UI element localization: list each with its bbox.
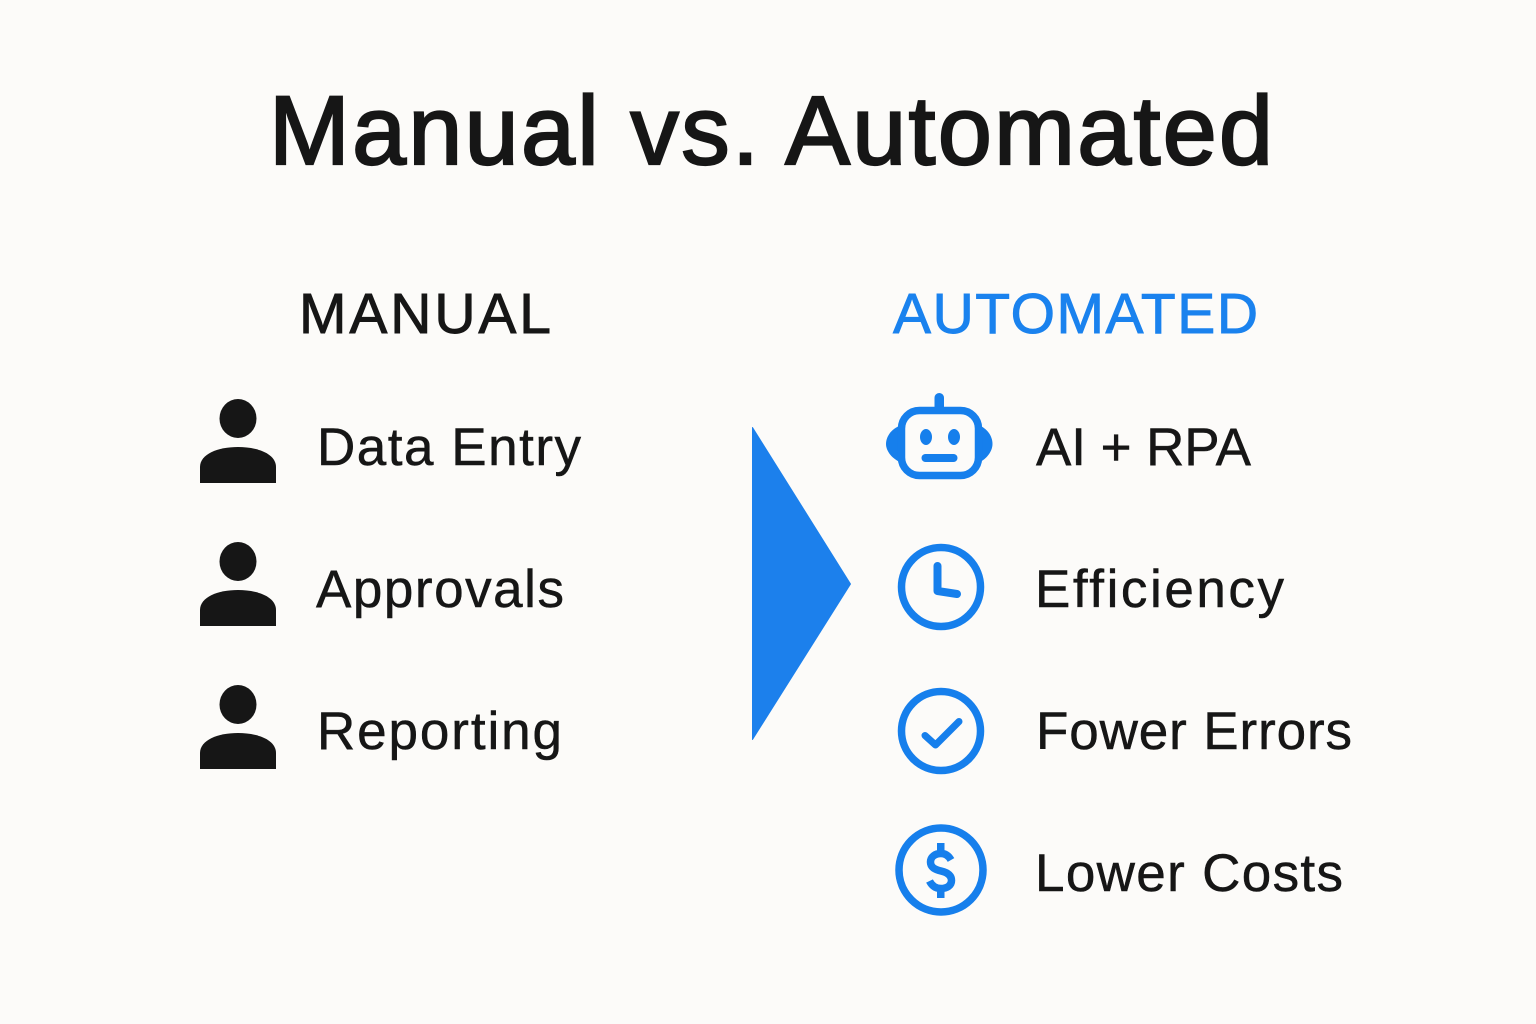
panel: automated: [886, 282, 1352, 912]
text: fower errors: Fower Errors: [1036, 702, 1352, 761]
text: lower costs: Lower Costs: [1035, 844, 1343, 903]
panel: manual: [200, 282, 582, 769]
icon: clock: [902, 548, 980, 626]
title: Manual vs. Automated: [269, 76, 1273, 185]
arrow: manual to automated: [752, 428, 850, 740]
icon: dollar circle: [899, 828, 983, 912]
icon: robot: [886, 393, 992, 476]
heading: automated: AUTOMATED: [893, 282, 1258, 346]
icon: check circle: [902, 692, 980, 770]
text: efficiency: Efficiency: [1035, 560, 1284, 619]
icon: person reporting: [200, 685, 276, 769]
text: reporting: Reporting: [317, 702, 562, 761]
text: data entry: Data Entry: [317, 418, 582, 477]
icon: person approvals: [200, 542, 276, 626]
heading: manual: MANUAL: [299, 282, 551, 346]
text: approvals: Approvals: [316, 560, 564, 619]
text: ai + rpa: AI + RPA: [1036, 418, 1252, 477]
icon: person data entry: [200, 399, 276, 483]
